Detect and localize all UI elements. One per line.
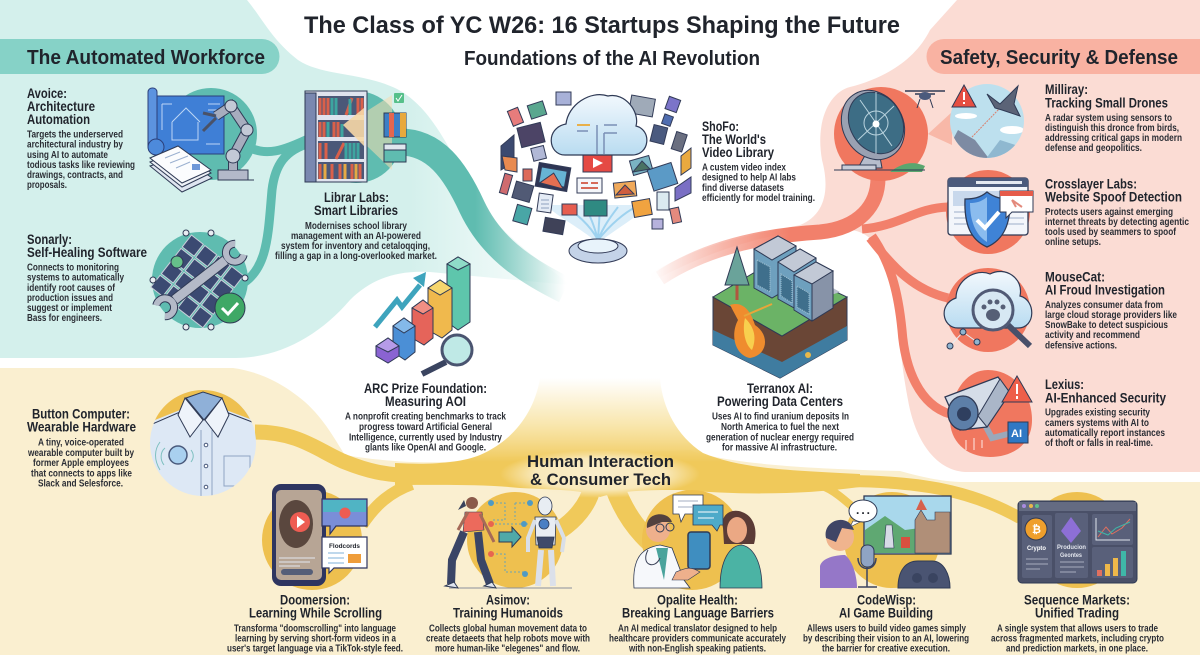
text: button computer: A tiny, voice-operated [38,437,124,449]
text: opalite health: healthcare providers communicate accurately [609,632,786,644]
text: librar labs: Librar Labs: [324,190,389,205]
text: sonarly: systems to automatically [27,272,124,284]
text: doomersion: user's target language via a TikTok-style feed. [227,642,403,654]
text: opalite health: with non-English speaking patients. [628,642,766,654]
icon: shofo video cloud ring [499,92,691,263]
text: avoice [27,86,135,191]
icon: button computer shirt [150,390,260,500]
heading pill: safety security defense: Safety, Security & Defense [940,47,1178,69]
text: terranox ai: North America to fuel the next [721,421,839,433]
text: arc prize foundation [345,381,506,453]
text: terranox ai: Terranox AI: [747,381,813,396]
text: sonarly [27,232,147,324]
icon: sequence markets trading dashboard: Geontes [1060,553,1083,559]
text: avoice: Avoice: [27,86,67,101]
text: arc prize foundation: ARC Prize Foundation: [364,381,487,396]
text: shofo [702,119,815,204]
text: button computer: Slack and Selesforce. [38,477,123,489]
icon: asimov walker and humanoid robot [445,492,572,588]
heading pill: automated workforce [0,39,280,74]
icon: avoice blueprint and robot arm [148,88,257,192]
text: shofo: find diverse datasets [702,182,784,194]
icon: codewisp game scene, microphone and gamepad: ... [856,503,870,517]
icon: opalite doctor, phone and patient [634,490,762,590]
text: avoice: Architecture [27,99,95,114]
text: avoice: todious tasks like reviewing [27,159,135,171]
text: sequence markets: Unified Trading [1035,606,1119,621]
text: button computer: former Apple employees [33,457,129,469]
text: sonarly: identify root causes of [27,282,115,294]
text: crosslayer labs: online setups. [1045,236,1101,248]
text: doomersion: Learning While Scrolling [249,606,382,621]
text: codewisp: Allews users to build video games simply [807,622,966,634]
text: crosslayer labs: Website Spoof Detection [1045,189,1182,204]
text: shofo: ShoFo: [702,119,739,134]
text: sequence markets: and prediction markets, in one place. [1006,642,1148,654]
text: arc prize foundation: glants like OpenAI and Google. [365,441,486,453]
panel: human interaction background [0,368,1200,655]
text: shofo: Video Library [702,145,774,160]
text: librar labs: system for inventory and cetaloqqing, [281,240,430,252]
text: terranox ai: Uses AI to find uranium deposits In [712,411,849,423]
text: mousecat: MouseCat: [1045,270,1105,285]
text: sonarly: Sonarly: [27,232,72,247]
text: milliray [1045,82,1182,154]
text: sonarly: production issues and [27,292,113,304]
text: arc prize foundation: Intelligence, currently used by Industry [349,431,502,443]
text: opalite health: Breaking Language Barriers [622,606,774,621]
text: opalite health: An AI medical translator designed to help [618,622,777,634]
text: avoice: Automation [27,112,90,127]
text: lexius: AI-Enhanced Security [1045,390,1166,405]
text: shofo: efficiently for model training. [702,192,815,204]
text: lexius: Lexius: [1045,377,1084,392]
text: shofo: A custem video index [702,162,786,174]
text: mousecat: activity and recommend [1045,329,1140,341]
text: avoice: using AI to automate [27,149,108,161]
icon: doomersion phone and flashcards [262,484,367,590]
text: avoice: Targets the underserved [27,128,123,140]
text: avoice: proposals. [27,179,67,191]
icon: mousecat cloud and paw magnifier [944,268,1032,352]
section heading: foundations: Foundations of the AI Revolution [464,48,760,70]
icon: terranox servers over uranium deposit [713,236,847,378]
icon: arc prize bar chart with magnifier [375,257,472,374]
text: lexius [1045,377,1166,449]
text: codewisp: the barrier for creative execution. [822,642,950,654]
text: terranox ai: generation of nuclear energy required [706,431,854,443]
text: avoice: drawings, contracts, and [27,169,123,181]
text: codewisp [803,593,969,654]
text: mousecat: AI Froud Investigation [1045,283,1165,298]
text: codewisp: by describing their vision to an AI, lowering [803,632,969,644]
text: terranox ai: Powering Data Centers [717,394,843,409]
icon: doomersion phone and flashcards: Flodcords [329,543,360,550]
heading pill: safety security defense [926,39,1200,74]
icon: lexius security camera with AI chip: AI [1011,428,1022,440]
text: sequence markets: Sequence Markets: [1024,593,1130,608]
text: terranox ai: for massive AI infrastructure. [722,441,837,453]
icon: milliray radar dish, drone and bird [829,79,1025,181]
text: terranox ai [706,381,854,453]
text: librar labs: Modernises school library [305,220,407,232]
text: librar labs: Smart Libraries [314,203,398,218]
text: codewisp: AI Game Building [839,606,933,621]
text: button computer: Button Computer: [32,407,130,422]
icon: sequence markets trading dashboard: ₿ [1032,524,1041,536]
text: button computer: that connects to apps like [31,467,132,479]
text: lexius: automatically report instances [1045,427,1165,439]
text: doomersion: Transforma "doomscrolling" into language [234,622,396,634]
section heading: human interaction and consumer tech: & Consumer Tech [530,470,671,489]
text: milliray: Milliray: [1045,82,1088,97]
text: sonarly: Bass for engineers. [27,312,102,324]
text: avoice: architectural industry by [27,139,123,151]
icon: library shelf scanner [305,91,406,183]
icon: sequence markets trading dashboard: Crypto [1027,545,1046,552]
text: librar labs [275,190,437,262]
text: milliray: defense and geopolitics. [1045,142,1142,154]
icon: lexius security camera with AI chip [945,370,1032,457]
text: sequence markets: A single system that allows users to trade [997,622,1158,634]
text: mousecat [1045,270,1177,351]
text: shofo: The World's [702,132,766,147]
text: asimov: Asimov: [486,593,530,608]
text: asimov: more human-like "elegenes" and flow. [435,642,580,654]
text: opalite health [609,593,786,654]
text: button computer [27,407,136,489]
text: crosslayer labs [1045,176,1189,248]
section heading: human interaction and consumer tech: Human Interaction [527,452,674,471]
text: doomersion: learning by serving short-form videos in a [235,632,396,644]
heading pill: automated workforce: The Automated Workforce [27,47,265,69]
text: asimov: Training Humanoids [453,606,563,621]
text: mousecat: Analyzes consumer data from [1045,299,1163,311]
text: arc prize foundation: A nonprofit creating benchmarks to track [345,411,506,423]
text: librar labs: management with an AI-powered [291,230,421,242]
title: The Class of YC W26: 16 Startups Shaping the Future [304,12,900,39]
text: sequence markets [991,593,1164,654]
text: mousecat: defensive actions. [1045,339,1117,351]
text: opalite health: Opalite Health: [657,593,738,608]
icon: crosslayer browser with shield [946,170,1033,254]
text: codewisp: CodeWisp: [857,593,916,608]
text: shofo: designed to help AI labs [702,172,796,184]
text: button computer: wearable computer built by [27,447,134,459]
text: milliray: Tracking Small Drones [1045,95,1168,110]
icon: sonarly wrench on grid [150,230,248,330]
text: asimov: create detaeets that help robots move with [426,632,590,644]
text: doomersion [227,593,403,654]
text: lexius: Upgrades existing security [1045,407,1150,419]
text: crosslayer labs: Crosslayer Labs: [1045,176,1137,191]
panel: automated workforce background [0,0,570,358]
text: sonarly: suggest or implement [27,302,112,314]
text: arc prize foundation: Measuring AOI [385,394,466,409]
text: asimov [426,593,590,654]
text: arc prize foundation: progress toward Artificial General [359,421,492,433]
text: doomersion: Doomersion: [280,593,350,608]
section heading: human interaction and consumer tech [527,452,674,489]
panel: safety security and defense background [640,0,1200,472]
text: button computer: Wearable Hardware [27,420,136,435]
icon: sequence markets trading dashboard [1018,492,1137,588]
text: mousecat: SnowBake to detect suspicious [1045,319,1168,331]
text: sonarly: Self-Healing Software [27,245,147,260]
text: lexius: camers systems with AI to [1045,417,1149,429]
icon: codewisp game scene, microphone and gamepad [820,492,951,588]
text: lexius: of thoft or falls in real-time. [1045,437,1153,449]
icon: sequence markets trading dashboard: Producion [1057,545,1086,551]
text: sonarly: Connects to monitoring [27,262,119,274]
text: librar labs: filling a gap in a long-overlooked market. [275,250,437,262]
text: asimov: Collects global human movement data to [429,622,587,634]
